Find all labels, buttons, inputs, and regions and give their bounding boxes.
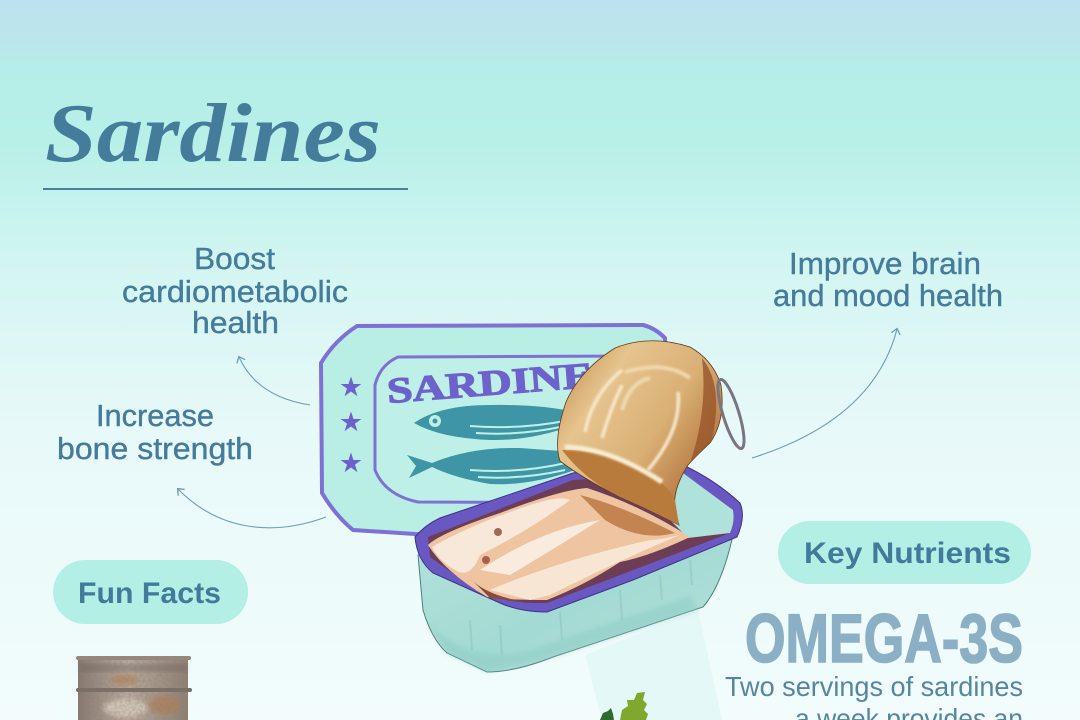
pale splash behind garnish — [585, 610, 722, 720]
section pill: Key Nutrients — [778, 521, 1031, 584]
can interior — [428, 473, 734, 603]
section pill: Key Nutrients: Key Nutrients — [804, 537, 1011, 570]
title: Sardines — [45, 87, 381, 180]
tin stars: ★ — [339, 448, 363, 478]
opened lid — [558, 341, 722, 525]
benefit label: brain and mood health: and mood health — [773, 278, 1003, 313]
illustration: parsley garnish — [600, 692, 648, 720]
illustration: open sardine tin — [415, 341, 749, 672]
tin fish bottom — [407, 448, 575, 484]
benefit label: bone strength: bone strength — [57, 431, 253, 466]
tin label text: SARDINES — [385, 353, 620, 411]
tin stars — [339, 372, 363, 478]
arrow: to brain and mood health — [752, 329, 897, 458]
benefit label: cardiometabolic health: cardiometabolic — [122, 274, 348, 309]
pull ring — [713, 377, 749, 451]
section pill: Fun Facts: Fun Facts — [78, 577, 221, 610]
benefit label: bone strength: Increase — [96, 398, 214, 433]
arrow: to bone strength — [178, 489, 326, 528]
can body — [418, 500, 733, 672]
section pill: Fun Facts — [53, 560, 248, 624]
illustration: closed sardine tin lid — [321, 325, 668, 535]
tin stars: ★ — [339, 372, 363, 402]
benefit label: cardiometabolic health: Boost — [194, 241, 275, 276]
benefit label: bone strength — [57, 398, 253, 466]
arrow: to cardiometabolic health — [239, 357, 310, 405]
tin fish top — [414, 405, 575, 440]
benefit label: brain and mood health: Improve brain — [789, 246, 981, 281]
sardine fillets — [428, 488, 690, 602]
nutrient description — [725, 671, 1023, 720]
benefit label: cardiometabolic health: health — [192, 305, 279, 340]
illustration: rusted can — [76, 656, 192, 720]
tin stars: ★ — [339, 407, 363, 437]
benefit label: cardiometabolic health — [122, 241, 348, 340]
benefit label: brain and mood health — [773, 246, 1003, 313]
nutrient description: Two servings of sardines — [725, 671, 1023, 702]
can rim — [415, 464, 742, 612]
